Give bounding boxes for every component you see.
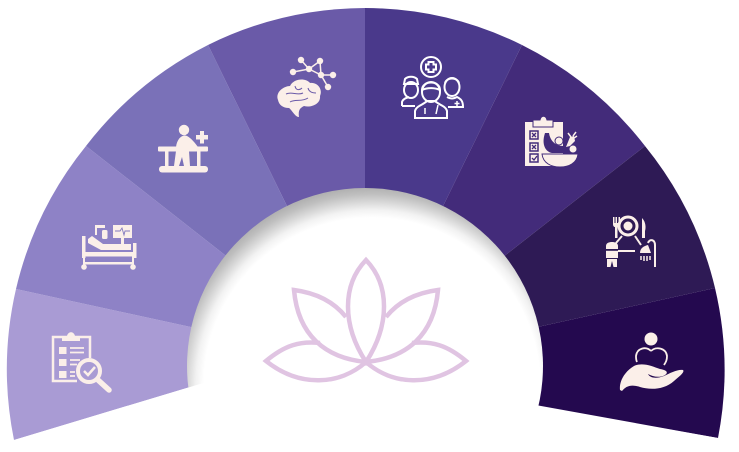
segment 8: deep purple [365,288,725,438]
centre disc with inner shadow [187,188,543,420]
lotus icon [266,260,466,380]
icon: hand holding heart and person [620,332,683,391]
white cut-away below the arc [0,370,739,452]
icon: medical team [402,57,463,118]
icon: diet plan clipboard and bowl [525,116,578,167]
icon: meal, clothing and shower [606,217,655,267]
icon: physiotherapy patient [158,125,208,172]
icon: brain with network [277,57,336,117]
segment 4 [208,8,365,365]
segment 5 [365,8,522,365]
segment 2 [16,146,365,365]
icon: clipboard with magnifier [53,332,109,390]
icon: hospital bed with monitor [81,225,136,270]
segment 6 [365,45,645,365]
segment 1: light lavender [7,289,365,440]
segment 3 [86,45,365,365]
segment 7 [365,146,715,365]
